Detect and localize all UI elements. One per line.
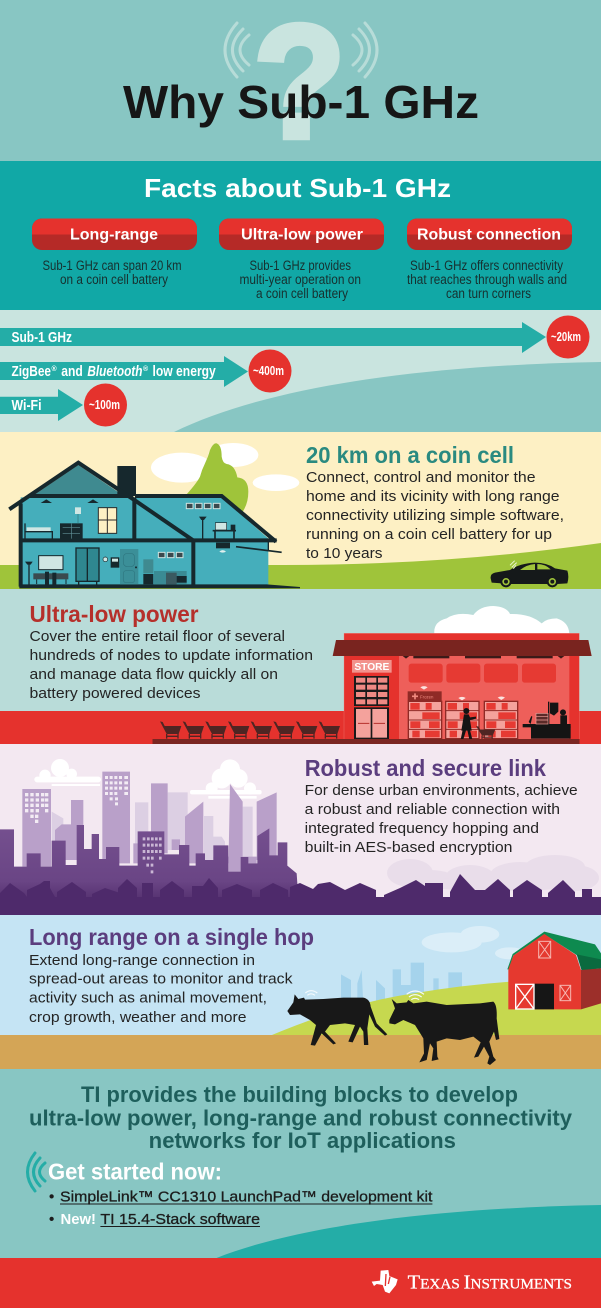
store floor xyxy=(152,739,580,744)
shopper xyxy=(461,708,476,739)
text block: TI statement xyxy=(29,1082,573,1153)
text block: TI statement: TI provides the building blocks to develop xyxy=(81,1082,518,1107)
link: 15.4-Stack software: • xyxy=(49,1211,54,1228)
fact card: ultra-low power: Ultra-low power xyxy=(241,226,363,244)
arrow: Sub-1 GHz range: ~20km xyxy=(551,329,581,344)
text block: retail description: Cover the entire retail floor of several xyxy=(30,628,285,645)
shopping cart xyxy=(476,726,495,739)
white clouds xyxy=(34,759,262,799)
dark tower windows xyxy=(143,837,162,873)
shelves: Frozen xyxy=(420,694,434,699)
text block: retail description xyxy=(30,628,313,702)
arrow: ZigBee and Bluetooth low energy range: and xyxy=(61,363,83,380)
panel: header xyxy=(0,0,601,171)
arrow: ZigBee and Bluetooth low energy range xyxy=(0,350,292,392)
fact card: robust connection: Robust connection xyxy=(417,226,561,244)
pale towers xyxy=(52,792,253,860)
fact card: long-range: Sub-1 GHz can span 20 km xyxy=(42,258,182,273)
arrow: Sub-1 GHz range xyxy=(0,316,590,358)
arrow: Wi-Fi range: ~100m xyxy=(89,397,120,412)
icon: right signal waves xyxy=(353,23,377,77)
heading: facts: Facts about Sub-1 GHz xyxy=(144,173,451,203)
text block: urban description: integrated frequency hopping and xyxy=(305,820,539,837)
illustration: clouds and tree xyxy=(151,443,299,512)
illustration: foreground houses xyxy=(0,874,601,915)
text block: farm description: crop growth, weather and more xyxy=(29,1009,246,1026)
heading: ultra-low power: Ultra-low power xyxy=(30,601,199,627)
text block: TI statement: networks for IoT applications xyxy=(149,1128,456,1153)
window xyxy=(98,508,117,533)
arrow: ZigBee and Bluetooth low energy range: ® xyxy=(143,365,149,373)
link: LaunchPad kit: • xyxy=(49,1188,54,1206)
shopping carts row xyxy=(160,721,340,739)
arrow: Sub-1 GHz range: Sub-1 GHz xyxy=(12,329,72,346)
illustration: cows xyxy=(287,991,499,1065)
text block: coin cell description: Connect, control and monitor the xyxy=(306,469,536,486)
ceiling lamps xyxy=(41,499,99,503)
shelves xyxy=(408,691,518,739)
arrow: ZigBee and Bluetooth low energy range: ® xyxy=(52,365,58,373)
text block: farm description: Extend long-range connection in xyxy=(29,952,255,969)
green lawn xyxy=(0,543,601,589)
fact card: robust connection: that reaches through walls and xyxy=(407,272,567,287)
text block: urban description: built-in AES-based encryption xyxy=(305,839,512,856)
store windows xyxy=(354,676,389,706)
link: LaunchPad kit: SimpleLink™ CC1310 LaunchPad™ development kit xyxy=(60,1188,433,1206)
icon: signal waves xyxy=(28,1153,45,1191)
fact card: ultra-low power xyxy=(219,218,384,301)
background hill xyxy=(174,362,601,432)
text block: urban description xyxy=(305,782,578,856)
bedroom furniture xyxy=(25,507,83,539)
link: 15.4-Stack software: New! xyxy=(60,1211,96,1228)
icon: connected car xyxy=(491,561,568,587)
store door xyxy=(354,707,389,739)
checkout counter xyxy=(523,702,571,739)
link: 15.4-Stack software: TI 15.4-Stack software xyxy=(100,1211,260,1228)
text block: urban description: a robust and reliable connection with xyxy=(305,801,560,818)
text block: coin cell description xyxy=(306,469,564,562)
illustration: farm landscape xyxy=(0,926,601,1069)
wardrobe xyxy=(76,548,99,585)
text block: retail description: and manage data flow quickly all on xyxy=(30,666,278,683)
panel: robust and secure link xyxy=(0,744,601,915)
fact card: ultra-low power: a coin cell battery xyxy=(256,286,348,301)
icon: Texas Instruments logo mark xyxy=(372,1270,398,1293)
fact card: ultra-low power: multi-year operation on xyxy=(240,272,361,287)
upper floor lamp and desk xyxy=(199,517,236,539)
arrow: ZigBee and Bluetooth low energy range: ZigBee xyxy=(12,363,51,380)
tower windows xyxy=(25,776,128,823)
fact card: long-range: Long-range xyxy=(70,226,158,244)
wall outlets xyxy=(158,503,220,558)
text block: coin cell description: connectivity utilizing simple software, xyxy=(306,507,564,524)
fact card: robust connection: Sub-1 GHz offers connectivity xyxy=(410,258,563,273)
logo wordmark: TEXAS INSTRUMENTS xyxy=(408,1271,572,1293)
panel: long range on a single hop xyxy=(0,915,601,1069)
wifi marks xyxy=(420,686,505,700)
ad panels xyxy=(409,664,556,683)
arrow: ZigBee and Bluetooth low energy range: ~400m xyxy=(253,363,284,378)
title: Why Sub-1 GHz xyxy=(123,76,479,128)
text block: farm description xyxy=(29,952,293,1026)
background hill xyxy=(216,1205,601,1258)
dark skyline xyxy=(0,825,298,900)
text block: farm description: activity such as animal movement, xyxy=(29,990,267,1006)
mid towers xyxy=(22,772,277,872)
fact card: robust connection: can turn corners xyxy=(446,286,531,301)
text block: coin cell description: to 10 years xyxy=(306,545,382,562)
illustration: store xyxy=(333,606,592,740)
arrow: ZigBee and Bluetooth low energy range: low energy xyxy=(152,363,216,380)
store sign: STORE xyxy=(354,662,390,673)
kitchen xyxy=(143,559,187,584)
living room furniture xyxy=(25,556,68,585)
heading: robust and secure link: Robust and secure link xyxy=(305,755,546,781)
icon: left signal waves xyxy=(225,23,249,77)
text block: TI statement: ultra-low power, long-range and robust connectivity xyxy=(29,1106,573,1130)
panel: call to action xyxy=(0,1069,601,1258)
heading: get started: Get started now: xyxy=(48,1158,222,1184)
arrow: ZigBee and Bluetooth low energy range: Bluetooth xyxy=(87,363,142,380)
arrow: Wi-Fi range: Wi-Fi xyxy=(12,397,42,414)
door xyxy=(120,549,138,584)
panel: ultra-low power xyxy=(0,589,601,744)
fact card: robust connection xyxy=(407,218,572,301)
background clouds xyxy=(387,855,599,891)
panel: range comparison xyxy=(0,310,601,432)
text block: coin cell description: running on a coin cell battery for up xyxy=(306,526,552,543)
panel: 20 km on a coin cell xyxy=(0,432,601,589)
text block: farm description: spread-out areas to monitor and track xyxy=(29,970,293,988)
heading: 20 km on a coin cell: 20 km on a coin cell xyxy=(306,442,514,468)
illustration: house cross-section xyxy=(9,463,300,588)
text block: coin cell description: home and its vicinity with long range xyxy=(306,488,560,505)
fact card: ultra-low power: Sub-1 GHz provides xyxy=(250,258,351,273)
illustration: barn xyxy=(507,932,601,1009)
text block: retail description: hundreds of nodes to update information xyxy=(30,647,313,664)
text block: urban description: For dense urban environments, achieve xyxy=(305,782,578,799)
text block: retail description: battery powered devices xyxy=(30,685,200,702)
heading: long range on a single hop: Long range on a single hop xyxy=(29,924,314,950)
illustration: city skyline xyxy=(0,759,298,900)
panel: footer xyxy=(0,1258,601,1308)
fact card: long-range: on a coin cell battery xyxy=(60,272,168,287)
thermostat xyxy=(103,557,119,568)
panel: facts about Sub-1 GHz xyxy=(0,161,601,310)
fact card: long-range xyxy=(32,218,197,287)
arrow: Wi-Fi range xyxy=(0,384,127,426)
